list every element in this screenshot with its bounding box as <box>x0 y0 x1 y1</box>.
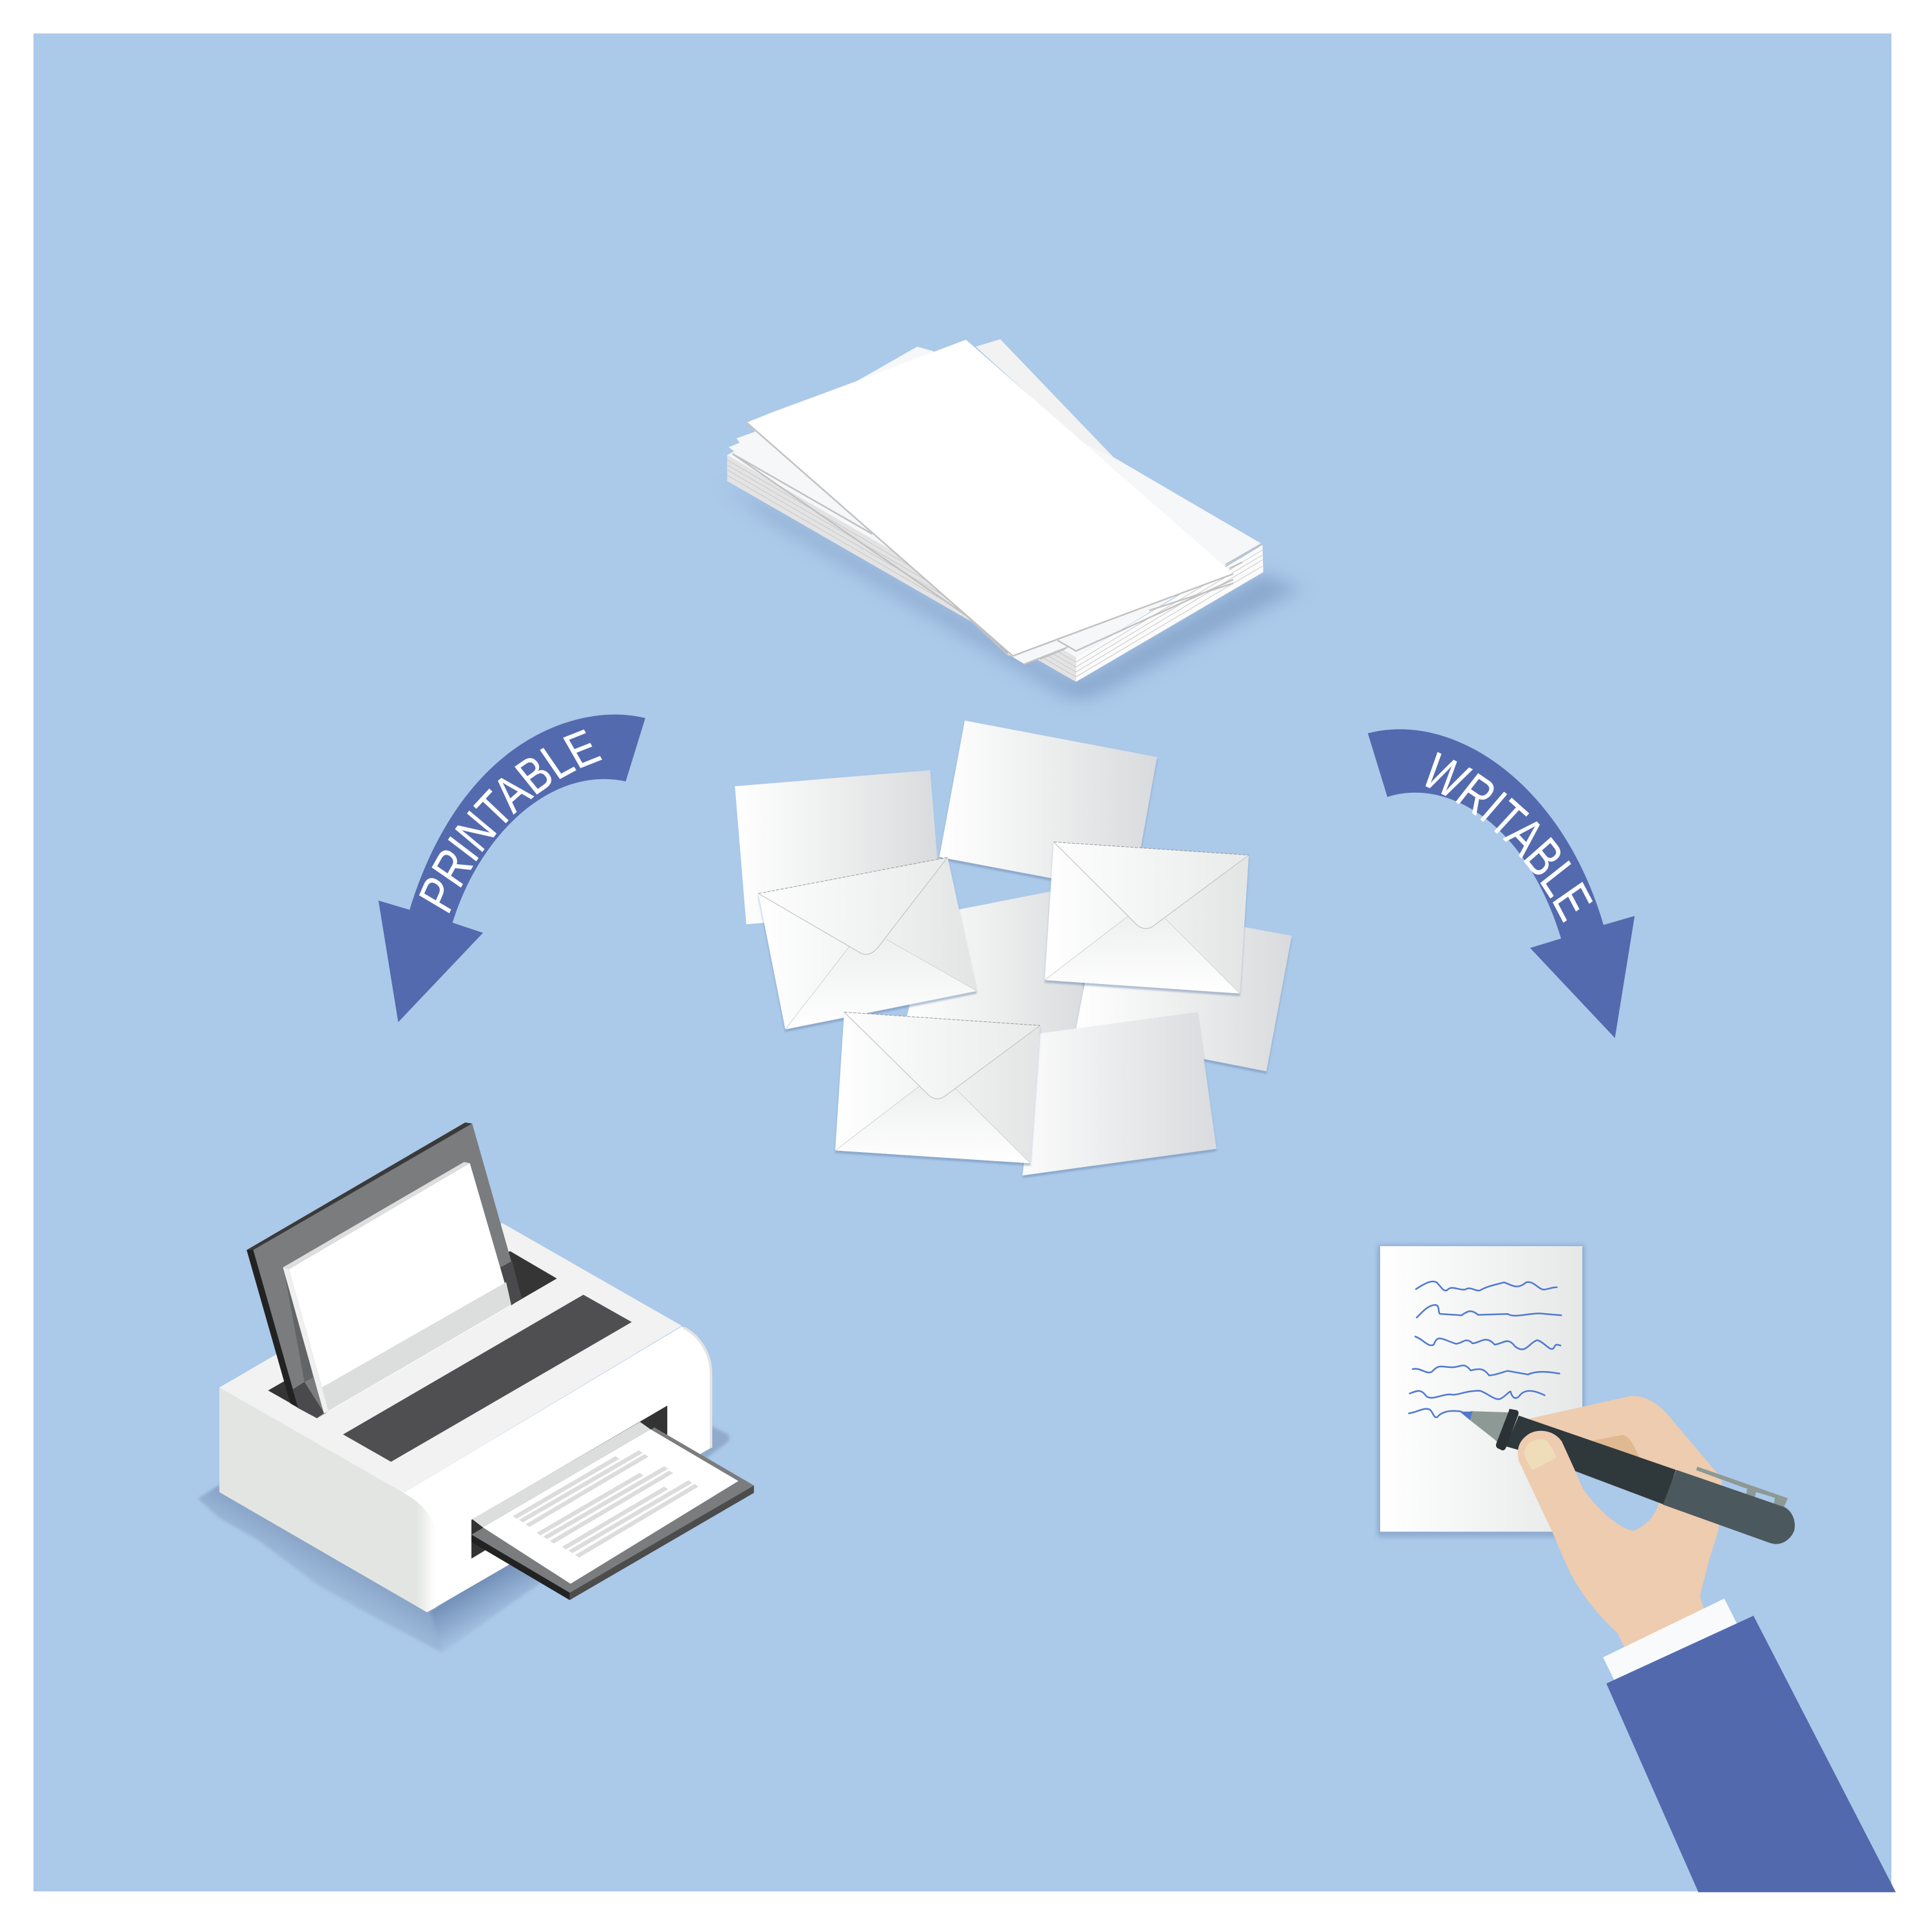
envelope back right <box>1045 842 1249 994</box>
handwriting lines <box>1409 1282 1561 1417</box>
output slot <box>471 1406 667 1558</box>
jacket sleeve <box>1606 1616 1896 1892</box>
writing hand with note <box>1378 1245 1896 1892</box>
pen barrel <box>1506 1416 1676 1504</box>
output tray <box>471 1428 754 1600</box>
overhanging sheet corners <box>1007 639 1071 664</box>
paper in tray <box>283 1162 511 1414</box>
printed sheet <box>472 1422 738 1584</box>
card 3 <box>900 890 1093 1048</box>
card 5 <box>1023 1012 1217 1175</box>
thumb <box>1518 1431 1582 1517</box>
printer top face <box>220 1223 682 1493</box>
top sheet <box>746 340 1233 656</box>
pen clip <box>1696 1466 1788 1508</box>
card 4 <box>1075 900 1292 1072</box>
note paper <box>1380 1246 1582 1531</box>
envelope back left <box>759 857 977 1029</box>
thumb nail <box>1524 1439 1557 1470</box>
gap between thumb and fingers <box>1575 1471 1663 1531</box>
paper tray back plate <box>247 1122 522 1418</box>
arrow: writable <box>1368 729 1634 1038</box>
printer left face <box>220 1388 436 1613</box>
pen nib <box>1459 1411 1511 1444</box>
label: writable: WRITABLE <box>1426 752 1593 923</box>
arrow: printable <box>379 715 645 1023</box>
shirt cuff <box>1603 1598 1737 1680</box>
stack of paper <box>727 339 1298 701</box>
note paper shadow <box>1378 1245 1584 1537</box>
envelope front <box>835 1012 1040 1163</box>
front dark panel <box>343 1294 632 1462</box>
group of envelopes and cards <box>735 721 1292 1175</box>
card 2 <box>940 721 1157 893</box>
stack right face <box>1076 545 1264 682</box>
rear paper slot <box>268 1251 557 1418</box>
label: printable: PRINTABLE <box>419 729 602 913</box>
stack shadow <box>727 482 1298 701</box>
printed text lines <box>513 1450 699 1558</box>
back sheet <box>976 339 1116 460</box>
curved arrow shape <box>1368 729 1634 1038</box>
lower sheets <box>727 346 1262 657</box>
printer front face <box>404 1327 711 1613</box>
finger shadow <box>1589 1435 1640 1459</box>
printer shadow <box>198 1426 730 1653</box>
sheet edges <box>733 454 1262 664</box>
card 1 <box>735 770 942 924</box>
pen cap <box>1663 1470 1795 1544</box>
curved arrow shape <box>379 715 645 1022</box>
hand <box>1518 1396 1722 1647</box>
printer <box>198 1122 754 1653</box>
pen collar <box>1496 1409 1519 1450</box>
stack left face <box>727 455 1076 682</box>
